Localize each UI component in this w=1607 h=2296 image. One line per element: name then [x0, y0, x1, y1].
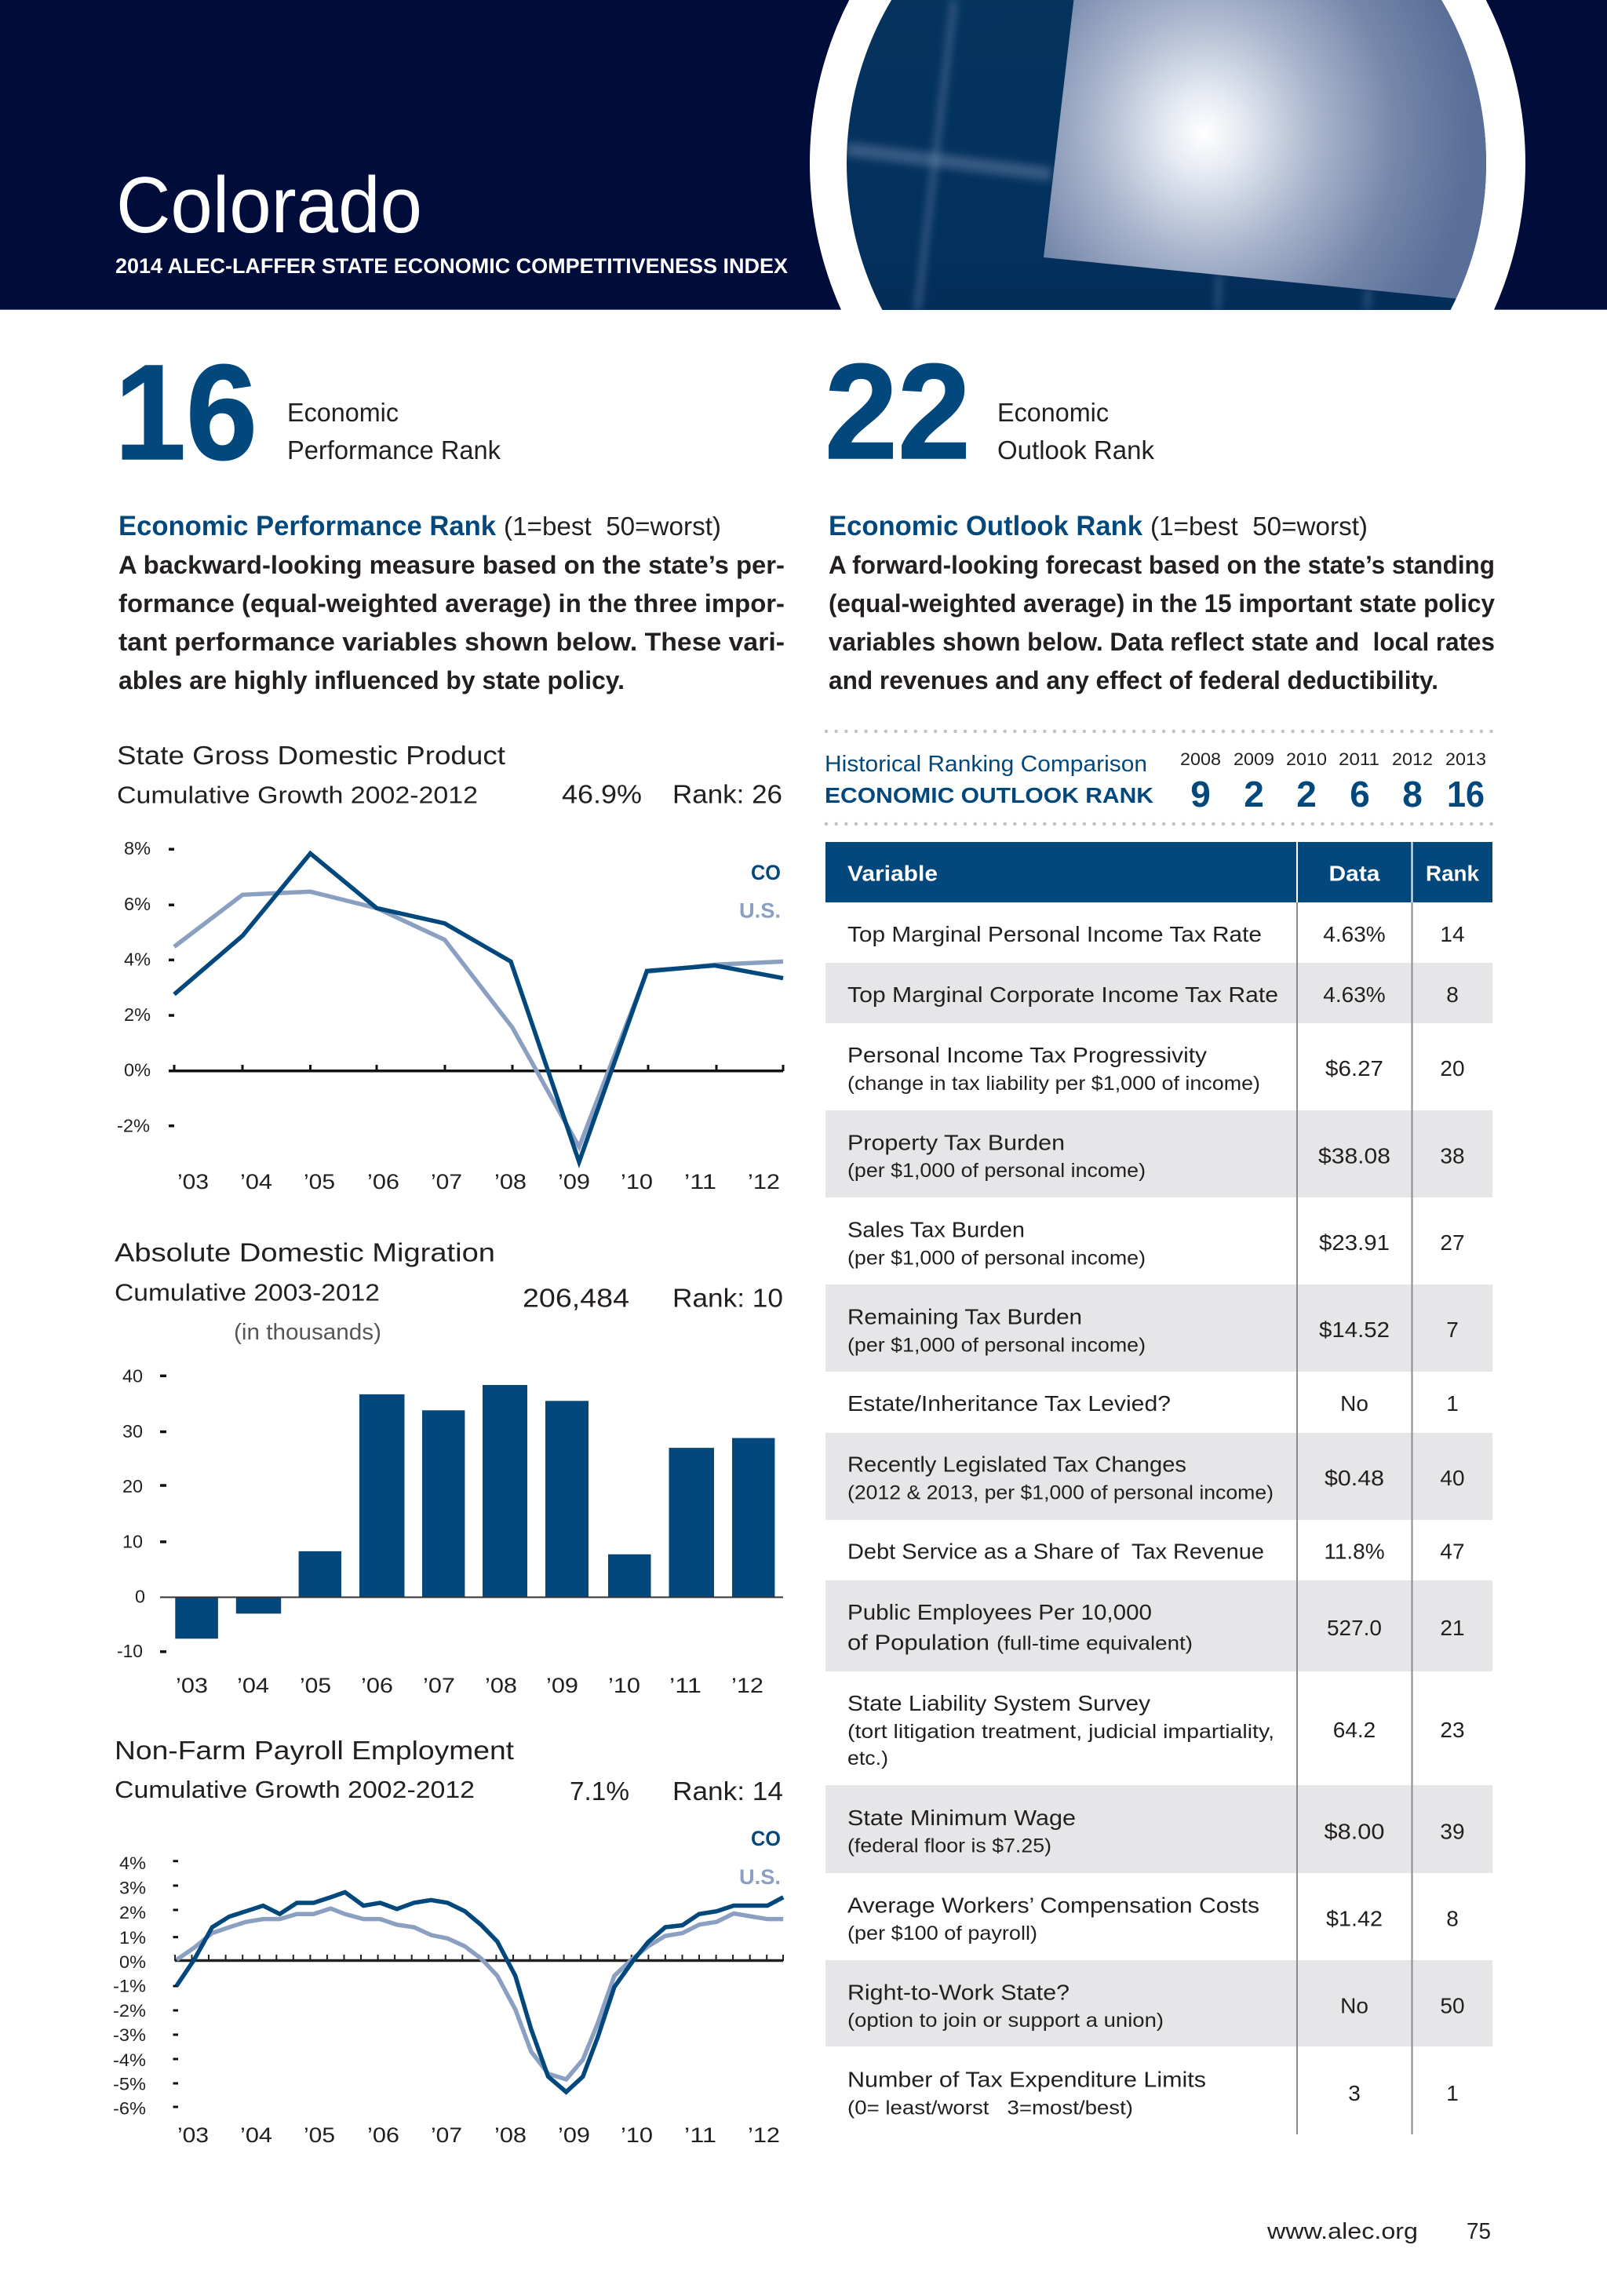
row: right-to-work: [847, 1981, 1465, 2032]
y axis labels and ticks: 4%: [119, 1853, 146, 1873]
outlook rank description: variables shown below. Data reflect state and local rates: [829, 628, 1495, 656]
x axis labels: [177, 1170, 780, 1194]
U.S. line: [174, 891, 783, 1147]
yearly ranks: 2: [1296, 774, 1317, 815]
table header: [825, 842, 1492, 902]
y axis labels and ticks: [113, 1853, 178, 2119]
row: estate inheritance tax: No: [1340, 1391, 1368, 1416]
row: state minimum wage: State Minimum Wage: [847, 1806, 1076, 1830]
zero axis: [175, 1959, 783, 1962]
shaded row bands: [825, 963, 1492, 2046]
y axis labels and ticks: -4%: [113, 2050, 146, 2070]
row: sales tax burden: Sales Tax Burden: [847, 1218, 1025, 1242]
outlook rank description: (equal-weighted average) in the 15 important state policy: [829, 589, 1495, 618]
state map globe: [810, 0, 1525, 310]
performance rank label: Economic: [287, 398, 399, 427]
U.S. line: [177, 1908, 783, 2079]
row: property tax burden: Property Tax Burden: [847, 1131, 1065, 1155]
years: [1180, 749, 1486, 769]
row: remaining tax burden: (per $1,000 of personal income): [847, 1335, 1146, 1357]
y axis labels and ticks: [117, 838, 174, 1135]
subtitle: 2014 ALEC-LAFFER STATE ECONOMIC COMPETITIVENESS INDEX: [115, 254, 788, 278]
row: state minimum wage: $8.00: [1325, 1819, 1384, 1844]
performance rank description: A backward-looking measure based on the state’s per-: [118, 551, 785, 579]
row: public employees: (full-time equivalent): [997, 1633, 1193, 1655]
CO line: [177, 1892, 783, 2092]
row: public employees: 527.0: [1327, 1616, 1382, 1640]
row: tax expenditure limits: Number of Tax Expenditure Limits: [847, 2068, 1206, 2092]
x axis labels: ’09: [546, 1674, 578, 1697]
yearly ranks: 16: [1447, 774, 1485, 815]
legend: [739, 861, 781, 923]
y axis labels and ticks: 2%: [124, 1004, 151, 1025]
row: public employees: 21: [1440, 1616, 1465, 1640]
chart heading: non-farm payroll employment: 7.1%: [570, 1777, 629, 1806]
outlook rank description: [829, 511, 1495, 694]
row: public employees: of Population: [847, 1631, 989, 1655]
y axis labels and ticks: 1%: [119, 1928, 146, 1948]
row: property tax burden: 38: [1440, 1144, 1465, 1168]
row: top marginal corporate income tax rate: [847, 982, 1459, 1007]
row: workers compensation: [847, 1893, 1459, 1944]
y axis labels and ticks: 0: [135, 1587, 145, 1607]
x axis labels: ’04: [240, 1170, 272, 1194]
row: debt service: Debt Service as a Share of Tax Revenue: [847, 1540, 1264, 1564]
performance rank number: 16: [115, 336, 257, 488]
row: personal income tax progressivity: $6.27: [1325, 1056, 1383, 1081]
y axis labels and ticks: 6%: [124, 894, 151, 914]
outlook rank description: A forward-looking forecast based on the state’s standing: [829, 551, 1495, 579]
row: debt service: 11.8%: [1324, 1540, 1385, 1564]
row: top marginal personal income tax rate: [847, 922, 1465, 946]
x axis labels: ’08: [485, 1674, 517, 1697]
y axis labels and ticks: -3%: [113, 2025, 146, 2045]
years: 2013: [1445, 749, 1486, 769]
x axis labels: ’11: [669, 1674, 701, 1697]
performance rank description: Economic Performance Rank: [118, 511, 497, 541]
row: top marginal corporate income tax rate: 4.63%: [1323, 982, 1386, 1007]
row: sales tax burden: (per $1,000 of personal income): [847, 1248, 1146, 1270]
row: recently legislated tax changes: [847, 1452, 1465, 1504]
performance rank description: formance (equal-weighted average) in the three impor-: [118, 589, 785, 618]
row: right-to-work: (option to join or support a union): [847, 2010, 1164, 2032]
legend: U.S.: [739, 1865, 781, 1889]
y axis labels and ticks: 30: [122, 1421, 143, 1441]
row: top marginal personal income tax rate: 4.63%: [1323, 922, 1386, 946]
y axis labels and ticks: 0%: [124, 1060, 151, 1081]
historical ranking comparison: ECONOMIC OUTLOOK RANK: [825, 783, 1153, 807]
row: sales tax burden: $23.91: [1319, 1230, 1390, 1255]
x axis labels: ’12: [731, 1674, 763, 1697]
row: estate inheritance tax: [847, 1391, 1459, 1416]
chart heading: absolute domestic migration: (in thousands): [234, 1320, 381, 1345]
years: 2008: [1180, 749, 1221, 769]
yearly ranks: 9: [1190, 774, 1211, 815]
performance rank label: Performance Rank: [287, 436, 501, 465]
row: recently legislated tax changes: (2012 & 2013, per $1,000 of personal income): [847, 1482, 1274, 1504]
years: 2009: [1233, 749, 1274, 769]
yearly ranks: 6: [1350, 774, 1370, 815]
row: state liability system survey: State Liability System Survey: [847, 1691, 1150, 1715]
y axis labels and ticks: 8%: [124, 838, 151, 858]
y axis labels and ticks: 40: [122, 1366, 143, 1387]
performance rank description: ables are highly influenced by state policy.: [118, 666, 625, 694]
row: workers compensation: $1.42: [1326, 1907, 1383, 1931]
x axis labels: ’07: [423, 1674, 455, 1697]
chart heading: non-farm payroll employment: Cumulative Growth 2002-2012: [115, 1776, 475, 1803]
row: property tax burden: $38.08: [1318, 1144, 1390, 1168]
y axis labels and ticks: 3%: [119, 1879, 146, 1898]
outlook rank description: (1=best 50=worst): [1150, 512, 1368, 541]
row: workers compensation: Average Workers’ Compensation Costs: [847, 1893, 1259, 1918]
x axis labels: ’08: [494, 2123, 527, 2147]
x axis labels: [177, 2123, 780, 2147]
performance rank number: [115, 336, 501, 488]
line chart: state gross domestic product: [117, 838, 783, 1194]
row: state liability system survey: 64.2: [1333, 1718, 1376, 1742]
row: state liability system survey: 23: [1440, 1718, 1465, 1742]
chart heading: non-farm payroll employment: [115, 1736, 783, 1806]
x axis labels: ’05: [300, 1674, 331, 1697]
outlook rank label: Outlook Rank: [997, 436, 1154, 465]
row: estate inheritance tax: Estate/Inheritance Tax Levied?: [847, 1391, 1171, 1416]
bar chart: absolute domestic migration: [117, 1366, 783, 1697]
row: recently legislated tax changes: $0.48: [1325, 1466, 1384, 1490]
legend: U.S.: [739, 899, 781, 923]
x axis labels: ’10: [608, 1674, 640, 1697]
row: sales tax burden: [847, 1218, 1465, 1270]
y axis labels and ticks: [117, 1366, 166, 1661]
row: remaining tax burden: $14.52: [1319, 1317, 1390, 1342]
row: recently legislated tax changes: Recently Legislated Tax Changes: [847, 1452, 1186, 1477]
y axis labels and ticks: -5%: [113, 2075, 146, 2094]
legend: [739, 1827, 781, 1889]
x axis labels: [176, 1674, 763, 1697]
row: remaining tax burden: Remaining Tax Burden: [847, 1305, 1082, 1329]
legend: CO: [751, 1827, 781, 1850]
row: top marginal corporate income tax rate: 8: [1446, 982, 1459, 1007]
row: right-to-work: Right-to-Work State?: [847, 1981, 1070, 2005]
y axis labels and ticks: 0%: [119, 1952, 146, 1972]
row: personal income tax progressivity: (change in tax liability per $1,000 of income): [847, 1073, 1260, 1095]
row: public employees: Public Employees Per 10,000: [847, 1600, 1152, 1624]
header banner: [0, 0, 1607, 310]
chart heading: absolute domestic migration: Rank: 10: [672, 1284, 783, 1312]
footer: www.alec.org: [1266, 2219, 1418, 2244]
zero axis: [169, 1070, 783, 1072]
row: estate inheritance tax: 1: [1446, 1391, 1459, 1416]
outlook rank description: and revenues and any effect of federal deductibility.: [829, 666, 1438, 694]
x axis labels: ’06: [367, 1170, 399, 1194]
performance rank label: [287, 398, 501, 465]
row: property tax burden: [847, 1131, 1465, 1182]
y axis labels and ticks: 20: [122, 1476, 143, 1496]
chart heading: non-farm payroll employment: Non-Farm Payroll Employment: [115, 1736, 514, 1765]
row: state minimum wage: [847, 1806, 1465, 1857]
footer: [1266, 2219, 1491, 2244]
row: remaining tax burden: 7: [1446, 1317, 1459, 1342]
x axis labels: ’09: [558, 1170, 590, 1194]
footer: 75: [1467, 2219, 1491, 2244]
y axis labels and ticks: -2%: [113, 2001, 146, 2021]
outlook rank label: Economic: [997, 398, 1109, 427]
row: tax expenditure limits: 3: [1348, 2081, 1361, 2105]
x axis labels: ’03: [176, 1674, 208, 1697]
table header: Rank: [1426, 862, 1479, 886]
policy variables table: [825, 842, 1492, 2134]
years: 2011: [1339, 749, 1379, 769]
table header: Variable: [847, 862, 938, 886]
row: workers compensation: 8: [1446, 1907, 1459, 1931]
row: state liability system survey: [847, 1691, 1465, 1769]
performance rank description: tant performance variables shown below. These vari-: [118, 628, 785, 656]
y axis labels and ticks: -10: [117, 1641, 143, 1661]
title: Colorado: [116, 162, 422, 250]
chart heading: absolute domestic migration: 206,484: [523, 1284, 629, 1312]
performance rank description: (1=best 50=worst): [504, 512, 721, 541]
row: state liability system survey: (tort litigation treatment, judicial impartiality,: [847, 1721, 1274, 1743]
row: top marginal personal income tax rate: Top Marginal Personal Income Tax Rate: [847, 922, 1262, 946]
outlook rank description: Economic Outlook Rank: [829, 511, 1143, 541]
x axis labels: ’05: [304, 1170, 335, 1194]
row: tax expenditure limits: (0= least/worst 3=most/best): [847, 2097, 1133, 2119]
x axis labels: ’08: [494, 1170, 527, 1194]
yearly ranks: [1190, 774, 1485, 815]
bars: [175, 1385, 774, 1638]
yearly ranks: 2: [1244, 774, 1264, 815]
x axis labels: ’07: [431, 1170, 462, 1194]
x axis labels: ’03: [177, 1170, 209, 1194]
y axis labels and ticks: -6%: [113, 2099, 146, 2119]
row: debt service: 47: [1440, 1540, 1465, 1564]
row: property tax burden: (per $1,000 of personal income): [847, 1160, 1146, 1182]
chart heading: absolute domestic migration: [115, 1238, 783, 1345]
outlook rank number: [825, 335, 1154, 487]
row: top marginal personal income tax rate: 14: [1440, 922, 1465, 946]
x axis labels: ’12: [748, 1170, 780, 1194]
row: public employees: [847, 1600, 1465, 1655]
table header: Data: [1329, 862, 1380, 886]
row: sales tax burden: 27: [1440, 1230, 1465, 1255]
x axis labels: ’06: [367, 2123, 399, 2147]
x axis labels: ’07: [431, 2123, 462, 2147]
row: personal income tax progressivity: Personal Income Tax Progressivity: [847, 1043, 1207, 1067]
x axis labels: ’10: [621, 2123, 653, 2147]
y axis labels and ticks: 2%: [119, 1903, 146, 1922]
row: tax expenditure limits: [847, 2068, 1459, 2119]
x axis labels: ’11: [684, 2123, 716, 2147]
row: top marginal corporate income tax rate: Top Marginal Corporate Income Tax Rate: [847, 982, 1278, 1007]
chart heading: state gross domestic product: [117, 741, 782, 808]
chart heading: absolute domestic migration: Absolute Domestic Migration: [115, 1238, 495, 1266]
x axis labels: ’04: [240, 2123, 272, 2147]
x axis labels: ’05: [304, 2123, 335, 2147]
y axis labels and ticks: -1%: [113, 1977, 146, 1996]
x axis labels: ’09: [558, 2123, 590, 2147]
x axis labels: ’11: [684, 1170, 716, 1194]
historical ranking comparison: Historical Ranking Comparison: [825, 752, 1147, 777]
row: state minimum wage: 39: [1440, 1819, 1465, 1844]
row: debt service: [847, 1540, 1465, 1564]
CO line: [174, 854, 783, 1162]
performance rank description: [118, 511, 785, 694]
zero axis: [160, 1596, 783, 1598]
outlook rank number: 22: [825, 335, 971, 487]
row: workers compensation: (per $100 of payroll): [847, 1922, 1037, 1944]
x axis labels: ’06: [361, 1674, 393, 1697]
outlook rank label: [997, 398, 1154, 465]
y axis labels and ticks: 4%: [124, 949, 151, 969]
y axis labels and ticks: 10: [122, 1531, 143, 1551]
chart heading: state gross domestic product: Rank: 26: [672, 780, 782, 808]
row: personal income tax progressivity: 20: [1440, 1056, 1465, 1081]
row: personal income tax progressivity: [847, 1043, 1465, 1095]
chart heading: state gross domestic product: Cumulative Growth 2002-2012: [117, 782, 478, 808]
years: 2012: [1392, 749, 1433, 769]
x axis labels: ’03: [177, 2123, 209, 2147]
row: right-to-work: No: [1340, 1994, 1368, 2018]
row: right-to-work: 50: [1440, 1994, 1465, 2018]
x axis labels: ’12: [748, 2123, 780, 2147]
x axis labels: ’10: [621, 1170, 653, 1194]
years: 2010: [1286, 749, 1327, 769]
chart heading: non-farm payroll employment: Rank: 14: [672, 1777, 783, 1806]
x axis labels: ’04: [237, 1674, 269, 1697]
legend: CO: [751, 861, 781, 884]
line chart: non-farm payroll employment: [113, 1827, 783, 2147]
chart heading: state gross domestic product: State Gross Domestic Product: [117, 741, 505, 770]
row: tax expenditure limits: 1: [1446, 2081, 1459, 2105]
y axis labels and ticks: -2%: [117, 1115, 150, 1135]
chart heading: state gross domestic product: 46.9%: [562, 780, 642, 808]
chart heading: absolute domestic migration: Cumulative 2003-2012: [115, 1279, 380, 1306]
historical ranking comparison: [825, 731, 1493, 824]
row: recently legislated tax changes: 40: [1440, 1466, 1465, 1490]
row: state minimum wage: (federal floor is $7.25): [847, 1835, 1051, 1857]
yearly ranks: 8: [1402, 774, 1423, 815]
row: remaining tax burden: [847, 1305, 1459, 1357]
row: state liability system survey: etc.): [847, 1748, 888, 1769]
